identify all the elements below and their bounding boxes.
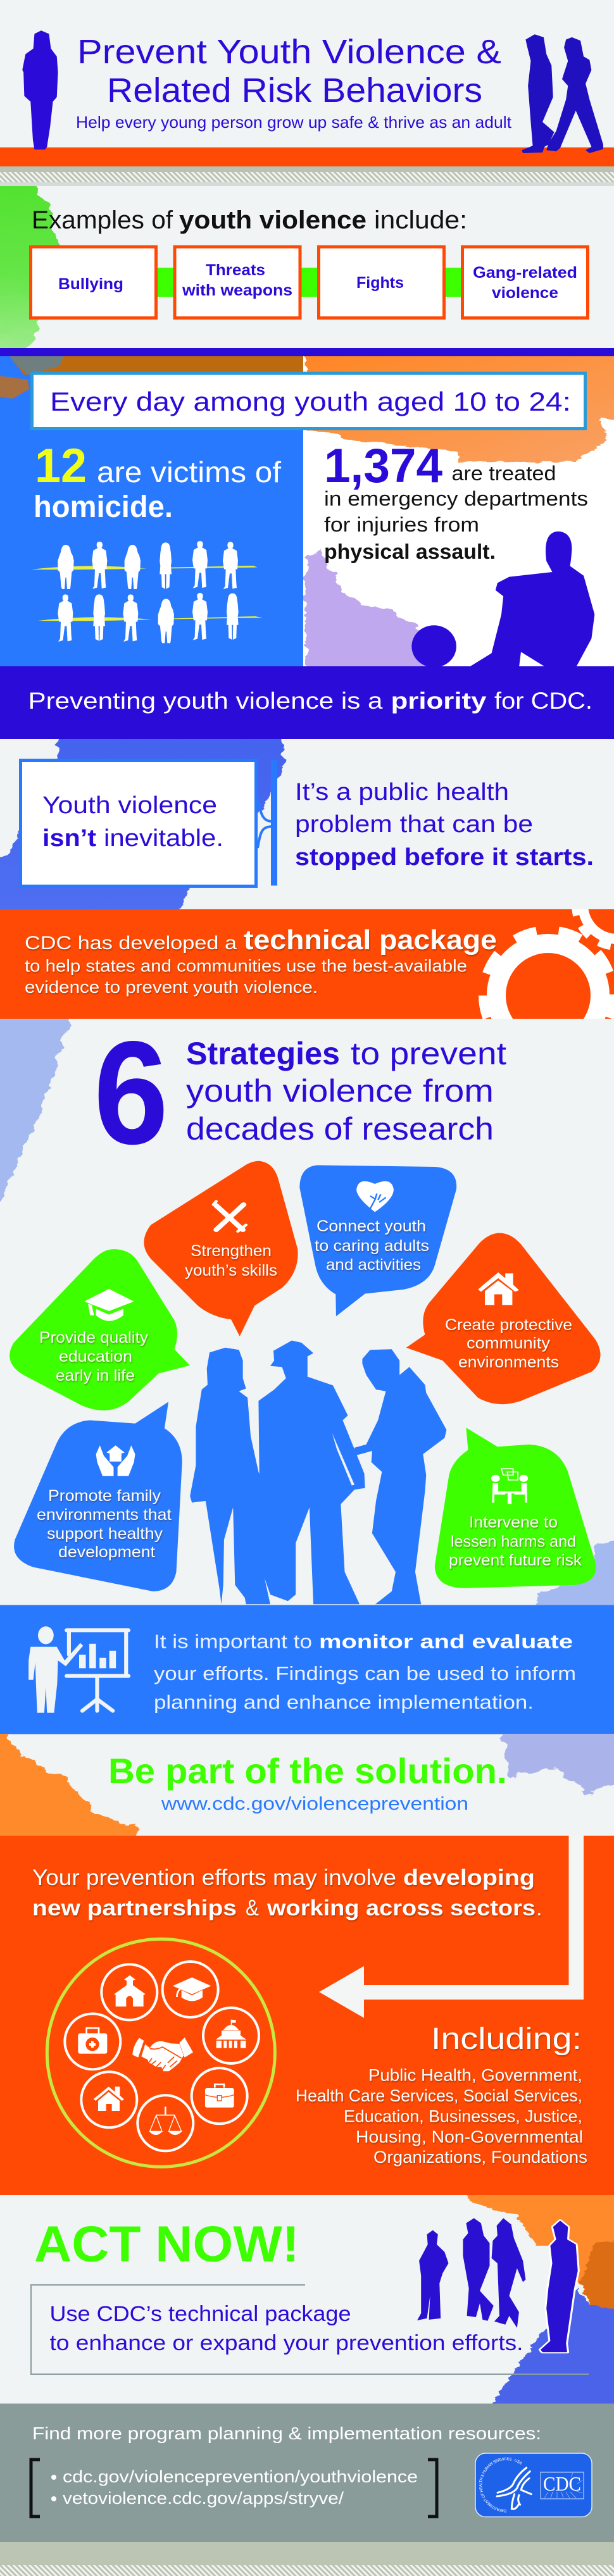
- link list: vetoviolence.cdc.gov/apps/stryve/: [63, 2489, 344, 2508]
- text: use CDC's package: to enhance or expand your prevention efforts.: [49, 2331, 523, 2355]
- text: technical package: to help states and communities use the best-available: [25, 957, 467, 976]
- panel: be part of the solution: [0, 1734, 614, 1836]
- lavender brush: [303, 548, 427, 666]
- text: use CDC's package: [49, 2302, 523, 2355]
- orange and blue brushes: [467, 2195, 614, 2403]
- title: Related Risk Behaviors: [107, 72, 482, 109]
- stat: 12 homicide: [34, 439, 281, 524]
- text: public health problem: It’s a public health: [295, 779, 509, 806]
- icon: graduation cap: [84, 1289, 134, 1321]
- logo: HHS and CDC: DEPARTMENT OF HEALTH & HUMAN SERVICES · USA: [479, 2458, 522, 2512]
- banner: priority: for CDC.: [494, 688, 592, 714]
- heading: youth violence: [179, 206, 367, 234]
- silhouette: seated youth with ball: [411, 532, 594, 668]
- right white half: [303, 356, 614, 666]
- panel: not inevitable: [0, 739, 592, 909]
- bubble: intervene: prevent future risk: [449, 1552, 582, 1569]
- left blue half: [0, 356, 303, 666]
- title: Prevent Youth Violence &: [77, 33, 501, 71]
- heading: strategies: Strategies: [186, 1036, 340, 1071]
- green connector bar: [152, 268, 468, 297]
- silhouette: two walking youth: [522, 34, 603, 153]
- text: technical package: [25, 924, 497, 997]
- box: gang-related violence: [462, 247, 587, 318]
- box: threats with weapons: with weapons: [182, 282, 292, 299]
- box: gang-related violence: Gang-related: [473, 264, 577, 282]
- numeral 6: 6: [94, 1011, 168, 1175]
- bubble: protective communities: Create protective: [445, 1316, 572, 1334]
- icon: capitol: [216, 2020, 246, 2048]
- bubble: connect youth: Connect youth: [316, 1217, 426, 1235]
- panel: six strategies: [0, 1006, 614, 1620]
- icon: heart and hand: [356, 1181, 394, 1212]
- box: bullying: [30, 247, 156, 318]
- bubble: connect youth: and activities: [326, 1256, 421, 1274]
- banner: priority: Preventing youth violence is a: [28, 688, 383, 714]
- box: threats with weapons: [175, 247, 300, 318]
- bubble: connect youth: [299, 1165, 456, 1316]
- stat: 12 homicide: are victims of: [97, 456, 281, 488]
- title: [77, 33, 501, 109]
- text: partnerships: .: [536, 1896, 542, 1920]
- box: threats with weapons: Threats: [206, 261, 265, 279]
- text: public health problem: problem that can be: [295, 811, 533, 838]
- stat: 1,374 assault: 1,374: [324, 439, 442, 493]
- icon: medical kit: [78, 2028, 107, 2054]
- heading: strategies: decades of research: [186, 1111, 494, 1147]
- stat: 12 homicide: homicide.: [34, 490, 173, 524]
- icon: school: [114, 1976, 146, 2007]
- box: fights: Fights: [356, 274, 404, 292]
- box: bullying: Bullying: [58, 275, 123, 293]
- icon: handshake: [132, 2038, 193, 2071]
- green watercolor brush: [0, 186, 61, 348]
- heading: act now: ACT NOW!: [34, 2216, 299, 2272]
- text: partnerships: new partnerships: [32, 1896, 237, 1920]
- bubble: intervene: Intervene to: [469, 1514, 558, 1531]
- text: partnerships: Your prevention efforts may involve: [32, 1865, 396, 1890]
- logo: HHS and CDC: [475, 2453, 592, 2517]
- heading: strategies: to prevent: [351, 1036, 506, 1071]
- text: partnerships: working across sectors: [266, 1896, 536, 1920]
- box: youth violence isn't inevitable: inevitable.: [104, 825, 223, 852]
- icon: counseling table: [491, 1469, 528, 1504]
- top purple rule: [0, 348, 614, 356]
- text: partnerships: developing: [403, 1865, 535, 1890]
- bubble: protective communities: community: [467, 1335, 551, 1352]
- wordmark: CDC: CDC: [543, 2472, 581, 2495]
- text: monitor and evaluate: It is important to: [154, 1630, 312, 1653]
- orange ground band: [0, 147, 614, 166]
- stat: 1,374 assault: are treated: [452, 462, 556, 485]
- heading: including: Including:: [431, 2022, 582, 2056]
- panel: partnerships: [0, 1836, 614, 2195]
- bubble: strengthen skills: Strengthen: [191, 1242, 272, 1260]
- text: monitor and evaluate: [154, 1630, 576, 1714]
- orange brush, right: [304, 356, 614, 463]
- callout box: every day: Every day among youth aged 10 to 24:: [50, 387, 571, 416]
- callout box: every day: [32, 373, 585, 429]
- panel: technical package: [0, 909, 614, 1019]
- bubble: protective communities: [406, 1233, 601, 1404]
- pictogram: 12 people: [30, 541, 263, 643]
- bubble: family environments: Promote family: [48, 1487, 161, 1505]
- text: technical package: technical package: [244, 924, 497, 955]
- blue brush: [0, 739, 286, 909]
- silhouette: standing girl: [22, 30, 58, 149]
- box: youth violence isn't inevitable: isn’t: [42, 825, 96, 852]
- heading: include:: [374, 206, 467, 234]
- text: partnerships: [32, 1865, 542, 1920]
- text: public health problem: stopped before it starts.: [295, 844, 594, 871]
- text: find more: Find more program planning & implementation resources:: [32, 2424, 541, 2443]
- bubble: protective communities: environments: [458, 1353, 559, 1371]
- panel: header: [0, 30, 614, 186]
- text: monitor and evaluate: your efforts. Findings can be used to inform: [154, 1662, 576, 1684]
- icon: graduation cap small: [173, 1977, 211, 2001]
- panel: act now: [30, 2195, 614, 2403]
- bubble: connect youth: to caring adults: [315, 1237, 429, 1255]
- bubble: family environments: environments that: [37, 1506, 172, 1524]
- box: youth violence isn't inevitable: [20, 761, 256, 886]
- bubble: family environments: [14, 1402, 182, 1591]
- heading: strategies: [186, 1036, 506, 1147]
- bubble: quality education: Provide quality: [39, 1329, 149, 1347]
- text: sector list: Public Health, Government,: [368, 2065, 582, 2084]
- arrow: [319, 1836, 584, 2018]
- icon: HHS eagle: [497, 2468, 531, 2509]
- icon: gears: [479, 909, 614, 1019]
- banner: priority: priority: [391, 688, 487, 714]
- bubble: family environments: support healthy: [47, 1525, 163, 1543]
- connector bracket: [258, 759, 277, 886]
- icon: briefcase: [205, 2084, 234, 2108]
- brown overlay brush, left: [0, 356, 303, 399]
- panel: examples of youth violence: [0, 186, 589, 348]
- bubble: quality education: education: [59, 1348, 132, 1366]
- bubble: quality education: [9, 1249, 190, 1410]
- box: gang-related violence: violence: [492, 284, 558, 302]
- brackets: [31, 2460, 437, 2517]
- bubble: family environments: development: [58, 1543, 155, 1561]
- icon: scales: [149, 2106, 182, 2135]
- heading: Examples of: [32, 206, 173, 234]
- subtitle: Help every young person grow up safe & thrive as an adult: [76, 113, 512, 132]
- heading: [32, 206, 467, 234]
- icon: house small: [94, 2087, 124, 2111]
- panel: resources footer: [0, 2403, 614, 2542]
- text: public health problem: [295, 779, 594, 871]
- text: sector list: Housing, Non-Governmental: [356, 2127, 583, 2146]
- silhouette: four youth: [417, 2218, 578, 2352]
- diagram: sector circle: [47, 1939, 275, 2167]
- box outline: [31, 2285, 589, 2374]
- box: fights: [319, 247, 444, 318]
- text: sector list: Health Care Services, Social Services,: [296, 2086, 582, 2105]
- text: partnerships: &: [246, 1896, 259, 1920]
- box: youth violence isn't inevitable: Youth violence: [42, 792, 217, 819]
- stat: 12 homicide: 12: [35, 439, 87, 493]
- bubble: quality education: early in life: [56, 1367, 135, 1384]
- text: technical package: evidence to prevent youth violence.: [25, 978, 318, 997]
- text: monitor and evaluate: monitor and evaluate: [319, 1630, 573, 1653]
- icon: tools: [213, 1202, 246, 1231]
- bottom hatch band: [0, 2542, 614, 2576]
- stat: 1,374 assault: physical assault.: [324, 540, 496, 563]
- bubble: strengthen skills: [144, 1161, 298, 1336]
- text: monitor and evaluate: planning and enhance implementation.: [154, 1691, 534, 1714]
- banner: priority: [0, 666, 614, 739]
- panel: monitor and evaluate: [0, 1605, 614, 1734]
- bubble: intervene: [435, 1428, 596, 1588]
- text: use CDC's package: Use CDC’s technical package: [49, 2302, 351, 2326]
- icon: hands and house: [96, 1445, 135, 1476]
- bubble: strengthen skills: youth’s skills: [185, 1262, 277, 1279]
- lavender brushes: [0, 1006, 614, 1620]
- stat: 1,374 assault: in emergency departments: [324, 487, 588, 510]
- panel: every day statistics: [0, 339, 614, 739]
- stat: 1,374 assault: [324, 439, 588, 563]
- text: sector list: [296, 2065, 587, 2167]
- heading: strategies: youth violence from: [186, 1073, 494, 1109]
- link list: [51, 2467, 418, 2508]
- heading: Be part of the solution.: [108, 1751, 507, 1791]
- url: www.cdc.gov/violenceprevention: [161, 1794, 468, 1814]
- stat: 1,374 assault: for injuries from: [324, 513, 479, 536]
- silhouette: three youth: [190, 1340, 446, 1604]
- icon: house: [478, 1272, 519, 1305]
- text: sector list: Organizations, Foundations: [373, 2148, 587, 2167]
- text: sector list: Education, Businesses, Justice,: [344, 2107, 582, 2126]
- orange and lavender brushes: [0, 1734, 614, 1836]
- icon: presenter with chart: [28, 1626, 128, 1713]
- divider hatch band: [0, 166, 614, 186]
- link list: cdc.gov/violenceprevention/youthviolence: [63, 2467, 418, 2486]
- bubble: intervene: lessen harms and: [451, 1533, 576, 1550]
- text: technical package: CDC has developed a: [25, 933, 237, 954]
